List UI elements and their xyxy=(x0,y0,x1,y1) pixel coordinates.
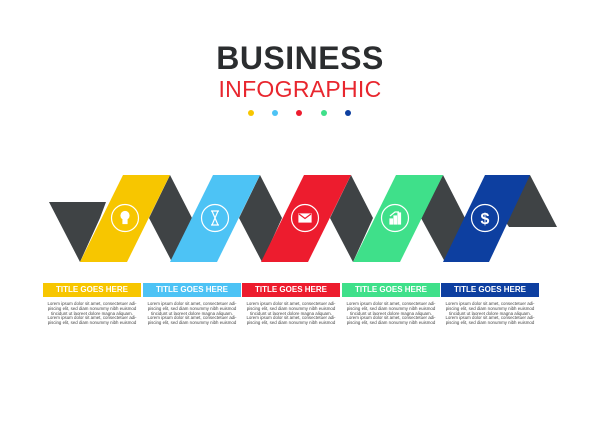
step 5: tincidunt ut laoreet dolore magna aliquam. xyxy=(449,311,531,316)
step 2: tincidunt ut laoreet dolore magna aliquam. xyxy=(151,311,233,316)
dark folds xyxy=(49,175,557,262)
icon: chart xyxy=(382,204,408,232)
step 5 xyxy=(441,283,539,325)
step 3: tincidunt ut laoreet dolore magna aliquam. xyxy=(250,311,332,316)
band navy xyxy=(443,175,530,262)
step 5: Lorem ipsum dolor sit amet, consectetuer adi- xyxy=(445,301,535,306)
icon: bulb xyxy=(112,204,138,232)
step 5: Lorem ipsum dolor sit amet, consectetuer adi- xyxy=(445,315,535,320)
step 1: tincidunt ut laoreet dolore magna aliquam. xyxy=(51,311,133,316)
subtitle: INFOGRAPHIC xyxy=(218,76,382,102)
step 1: piscing elit, sed diam nonummy nibh euismod xyxy=(48,306,136,311)
step 3 xyxy=(242,283,340,325)
step 2: Lorem ipsum dolor sit amet, consectetuer adi- xyxy=(147,301,237,306)
step 1: TITLE GOES HERE xyxy=(56,285,128,294)
step 1: Lorem ipsum dolor sit amet, consectetuer adi- xyxy=(47,315,137,320)
title: BUSINESS xyxy=(216,40,384,76)
step 4 xyxy=(342,283,440,325)
step 3: piscing elit, sed diam nonummy nibh euismod xyxy=(247,320,335,325)
step 3: piscing elit, sed diam nonummy nibh euismod xyxy=(247,306,335,311)
step 4: Lorem ipsum dolor sit amet, consectetuer adi- xyxy=(346,315,436,320)
icon: hourglass xyxy=(202,204,228,232)
step 1: Lorem ipsum dolor sit amet, consectetuer adi- xyxy=(47,301,137,306)
band red xyxy=(261,175,351,262)
step 3: Lorem ipsum dolor sit amet, consectetuer adi- xyxy=(246,301,336,306)
step 5: piscing elit, sed diam nonummy nibh euismod xyxy=(446,306,534,311)
step 4: TITLE GOES HERE xyxy=(355,285,427,294)
icon: mail xyxy=(292,204,318,232)
step 2: piscing elit, sed diam nonummy nibh euismod xyxy=(148,306,236,311)
step 5: piscing elit, sed diam nonummy nibh euismod xyxy=(446,320,534,325)
step 4: piscing elit, sed diam nonummy nibh euismod xyxy=(347,306,435,311)
step 5: TITLE GOES HERE xyxy=(454,285,526,294)
step 1 xyxy=(43,283,141,325)
step 3: TITLE GOES HERE xyxy=(255,285,327,294)
step 4: Lorem ipsum dolor sit amet, consectetuer adi- xyxy=(346,301,436,306)
step 2: Lorem ipsum dolor sit amet, consectetuer adi- xyxy=(147,315,237,320)
step 2 xyxy=(143,283,241,325)
band blue xyxy=(170,175,260,262)
step 2: piscing elit, sed diam nonummy nibh euismod xyxy=(148,320,236,325)
step 3: Lorem ipsum dolor sit amet, consectetuer adi- xyxy=(246,315,336,320)
step 2: TITLE GOES HERE xyxy=(156,285,228,294)
band green xyxy=(353,175,443,262)
band yellow xyxy=(80,175,170,262)
step 4: piscing elit, sed diam nonummy nibh euismod xyxy=(347,320,435,325)
step 1: piscing elit, sed diam nonummy nibh euismod xyxy=(48,320,136,325)
step 4: tincidunt ut laoreet dolore magna aliquam. xyxy=(350,311,432,316)
icon: dollar: $ xyxy=(481,211,490,228)
icon: dollar xyxy=(472,204,498,232)
